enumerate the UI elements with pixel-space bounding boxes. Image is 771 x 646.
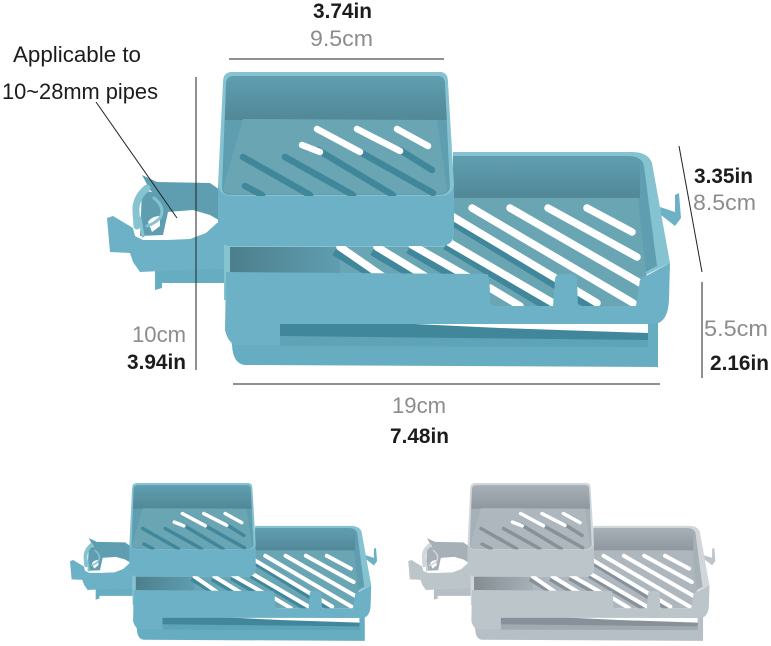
- bottom width label in: 7.48in: [390, 425, 449, 448]
- lower tray front face with notch and tab: [225, 263, 670, 345]
- lower tray base rail: [228, 320, 658, 367]
- pipe clamp: [107, 175, 224, 290]
- lower right dimension line: [701, 282, 703, 378]
- side hook: [660, 193, 681, 226]
- pipe note line 1: Applicable to: [13, 42, 141, 67]
- left height label in: 3.94in: [127, 351, 186, 374]
- depth label in: 3.35in: [694, 165, 753, 188]
- upper right dimension line: [679, 146, 702, 272]
- pipe arrow leader: [96, 102, 177, 218]
- lower height label in: 2.16in: [710, 352, 769, 375]
- top dimension line: [229, 58, 444, 60]
- lower tray interior: [224, 152, 670, 306]
- grey colour variant: [408, 483, 715, 641]
- upper tray: [218, 72, 454, 246]
- depth label cm: 8.5cm: [693, 190, 756, 215]
- lower tray slots: [334, 208, 640, 308]
- left height label cm: 10cm: [132, 322, 186, 347]
- bottom dimension line: [233, 383, 660, 385]
- left dimension line: [195, 77, 197, 370]
- top width label cm: 9.5cm: [310, 26, 373, 51]
- teal colour variant: [70, 483, 377, 641]
- pipe note line 2: 10~28mm pipes: [2, 79, 158, 104]
- bottom width label cm: 19cm: [392, 393, 446, 418]
- upper tray slots: [243, 129, 433, 195]
- lower height label cm: 5.5cm: [704, 316, 768, 341]
- main product: teal sink rack: [107, 72, 681, 367]
- top width label in: 3.74in: [313, 0, 372, 23]
